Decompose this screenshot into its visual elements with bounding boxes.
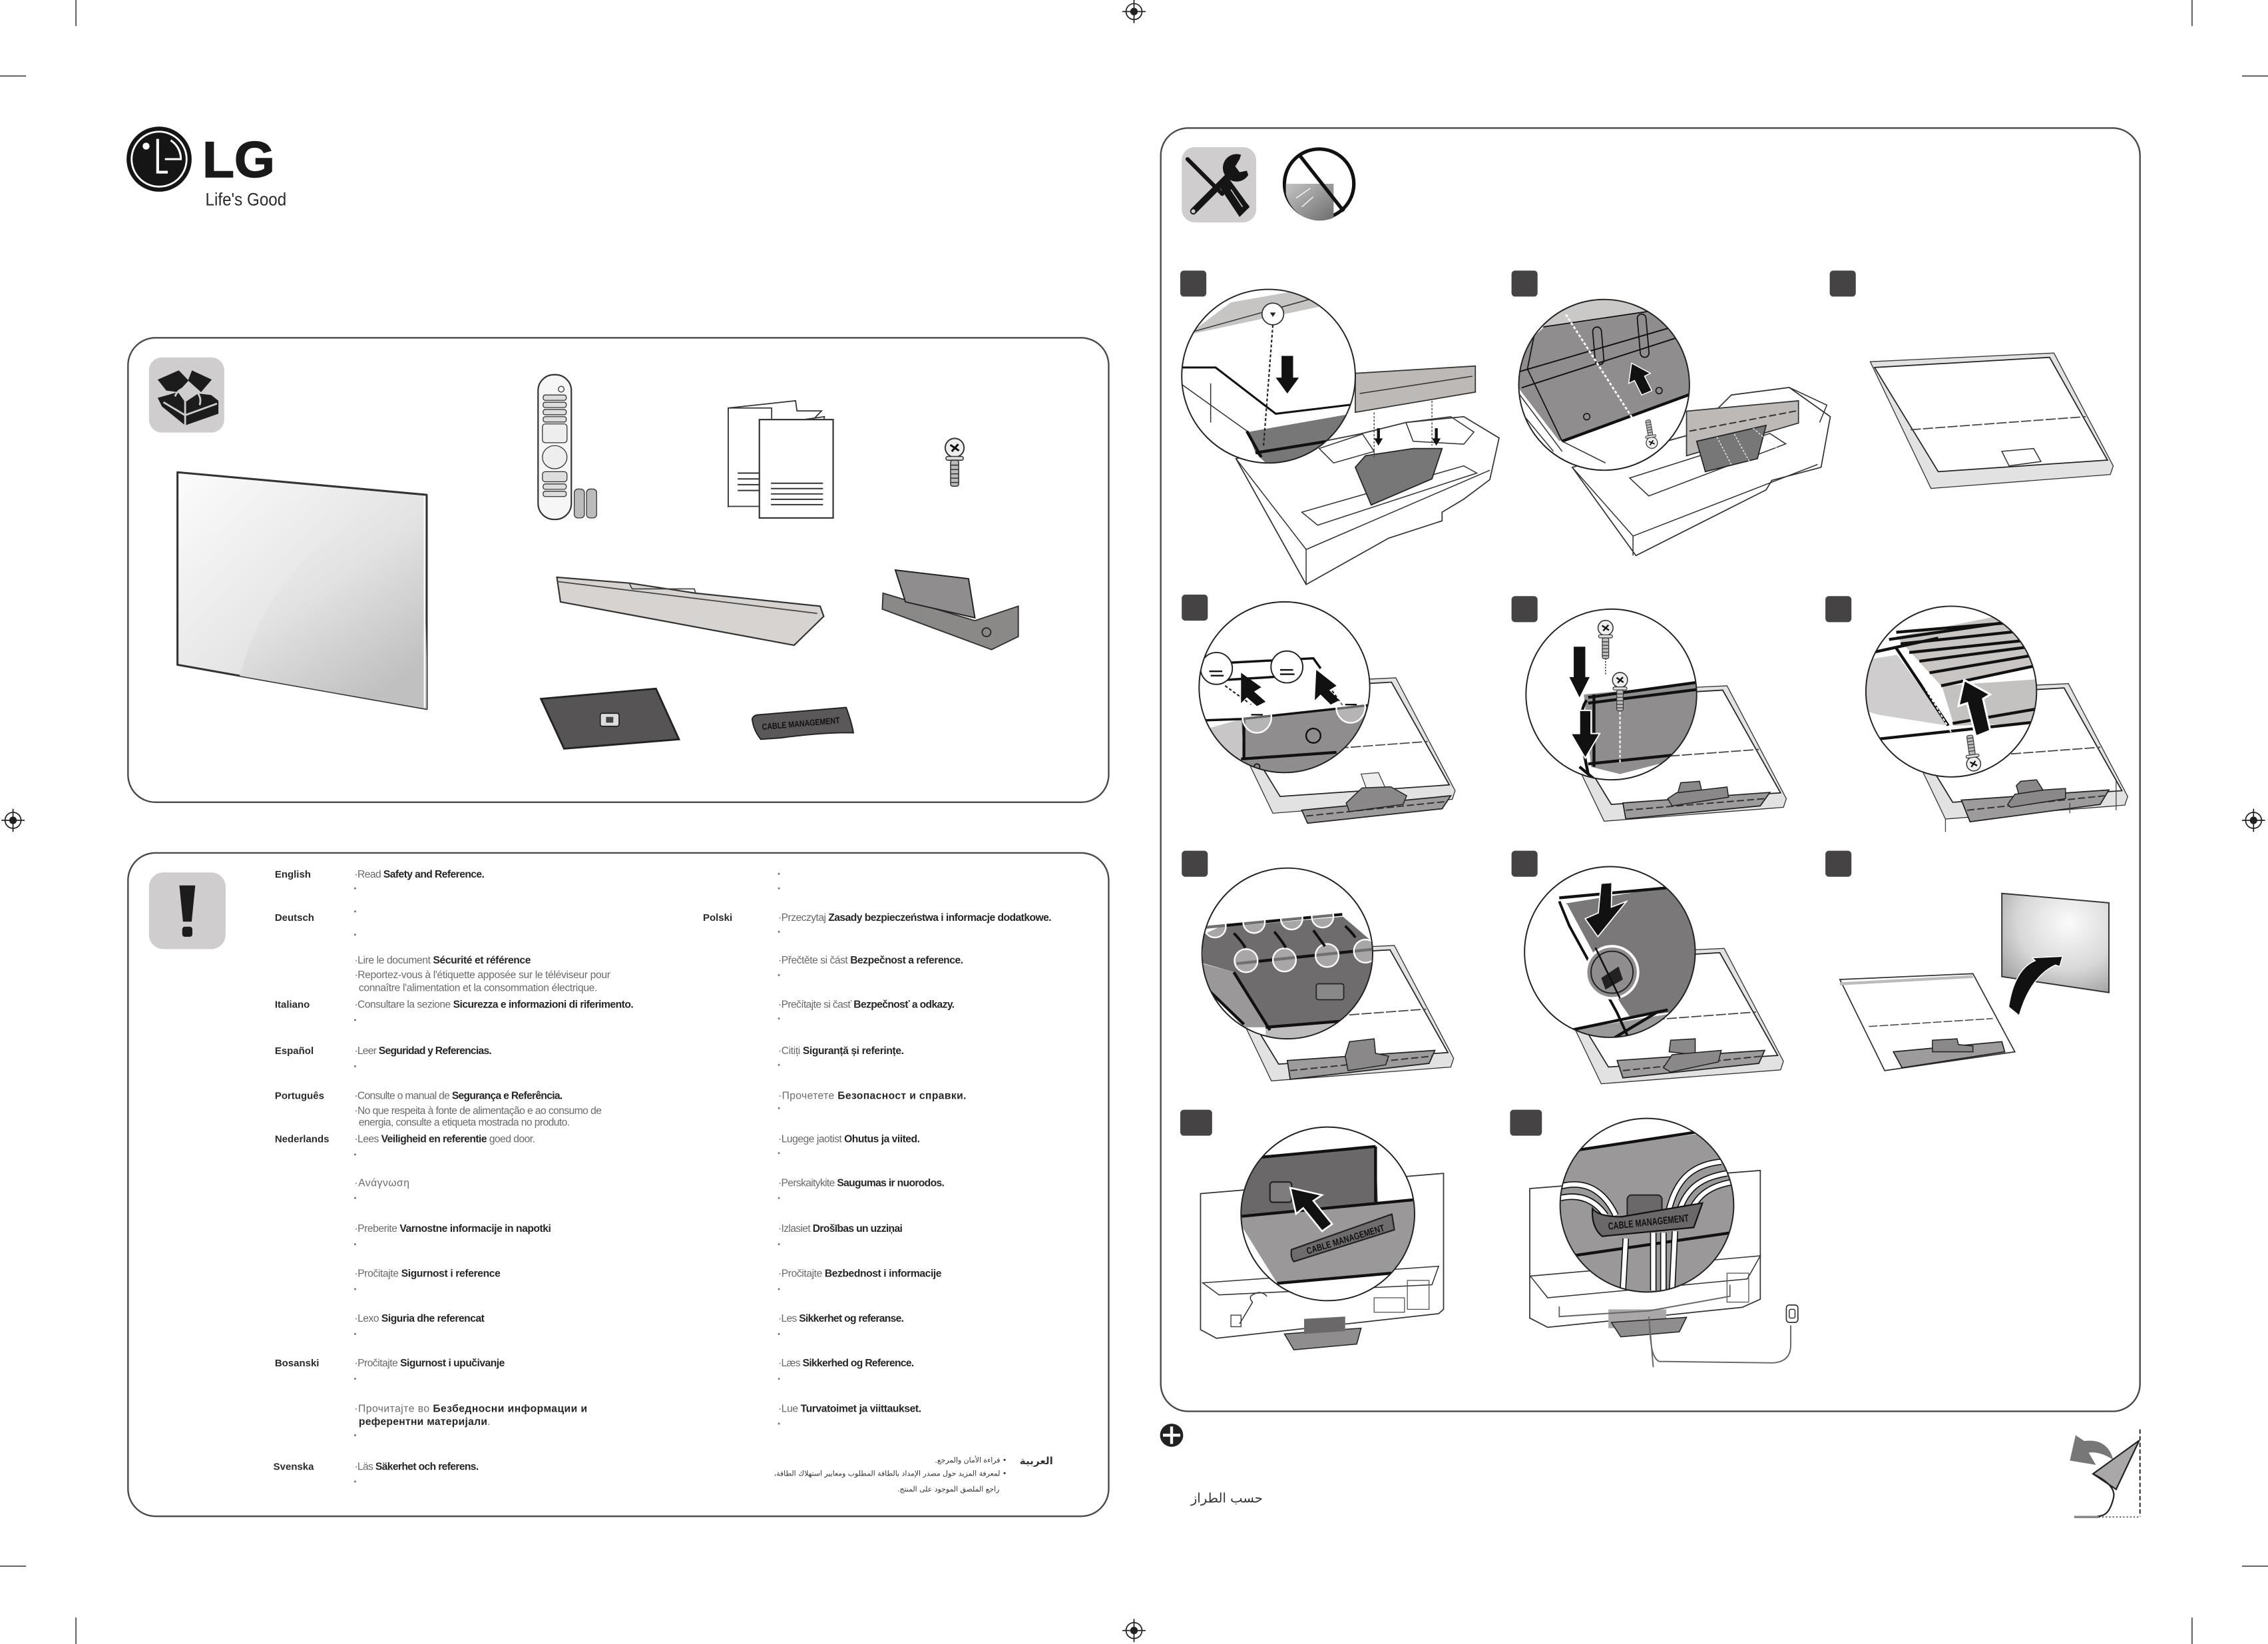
Arabic instructions <box>774 1455 1053 1494</box>
step 9 <box>1825 851 2109 1071</box>
instructions: right column: ·Læs Sikkerhed og Reference. <box>778 1358 914 1369</box>
step 11 magnified detail: CABLE MANAGEMENT <box>1608 1213 1690 1233</box>
step 1 magnified detail <box>1180 290 1359 470</box>
step 3 <box>1830 270 2114 489</box>
instructions: left column: ·Lees Veiligheid en referentie goed door. <box>354 1133 535 1145</box>
step 8 number badge <box>1512 851 1538 877</box>
instructions: right column: ·Lue Turvatoimet ja viittaukset. <box>778 1404 921 1415</box>
step 6 TV with stand <box>1885 684 2128 832</box>
step 10 magnified detail: CABLE MANAGEMENT <box>1305 1223 1386 1256</box>
instructions: left column: ·Lire le document Sécurité et référence <box>354 955 531 966</box>
instructions: left column: ·Consultare la sezione Sicurezza e informazioni di riferimento. <box>354 999 634 1010</box>
panel: language notes <box>128 853 1108 1516</box>
step 9 curved arrow <box>2008 956 2062 1015</box>
step 4 TV with stand <box>1212 678 1455 823</box>
Arabic instructions: • قراءة الأمان والمرجع. <box>935 1456 1007 1465</box>
remote control and batteries <box>538 375 596 519</box>
language names: left column: Nederlands <box>275 1133 329 1145</box>
step 4 <box>1182 595 1455 823</box>
instructions: left column: референтни материјали. <box>359 1416 491 1428</box>
step 7 <box>1182 851 1454 1081</box>
step 1 packaging drawing <box>1236 366 1499 585</box>
note: subject to model: حسب الطراز <box>1190 1490 1263 1506</box>
instructions: left column: ·Läs Säkerhet och referens. <box>354 1462 479 1473</box>
instructions: left column: ·No que respeita à fonte de alimentação e ao consumo de <box>354 1105 602 1117</box>
step 10 <box>1180 1110 1443 1350</box>
instructions: left column: ·Read Safety and Reference. <box>354 869 485 880</box>
LG logo <box>126 127 286 210</box>
instructions: right column: ·Izlasiet Drošības un uzziņai <box>778 1223 903 1234</box>
language names: left column: Bosanski <box>275 1358 319 1369</box>
step 3 number badge <box>1830 270 1856 296</box>
language name: Polski: Polski <box>703 912 732 924</box>
step 11 TV back with cables <box>1530 1171 1798 1367</box>
step 6 <box>1825 596 2128 832</box>
step 5 <box>1512 596 1786 821</box>
cable management clip: CABLE MANAGEMENT <box>762 715 840 732</box>
language names: left column: English <box>275 869 311 880</box>
registration mark: top <box>1122 0 1146 23</box>
instructions: left column: ·Preberite Varnostne informacije in napotki <box>354 1223 551 1234</box>
step 5 magnified detail <box>1526 609 1704 788</box>
step 9 number badge <box>1825 851 1851 877</box>
Arabic instructions: راجع الملصق الموجود على المنتج. <box>897 1485 999 1494</box>
step 8 <box>1512 851 1783 1084</box>
printed manuals <box>728 401 833 518</box>
step 10 magnified detail <box>1237 1127 1417 1300</box>
step 11 magnified detail <box>1555 1119 1735 1295</box>
stand screw <box>945 438 964 486</box>
instructions: left column: ·Прочитајте во Безбедносни информации и <box>354 1404 587 1415</box>
language names: left column: Português <box>275 1090 324 1101</box>
instructions: right column: ·Les Sikkerhet og referanse. <box>778 1313 904 1324</box>
icon: no scratching prohibition <box>1284 149 1354 220</box>
step 11 <box>1510 1110 1798 1367</box>
instructions: right column: ·Przeczytaj Zasady bezpieczeństwa i informacje dodatkowe. <box>778 912 1052 924</box>
instructions: left column: connaître l'alimentation et la consommation électrique. <box>359 982 597 993</box>
step 2 <box>1512 270 1831 555</box>
step 10 number badge <box>1180 1110 1212 1136</box>
panel: assembly steps <box>1161 128 2140 1412</box>
instructions: left column <box>354 869 634 1473</box>
icon: exclamation mark <box>149 872 226 949</box>
instructions: left column: ·Pročitajte Sigurnost i upučivanje <box>354 1358 505 1369</box>
instructions: left column: ·Pročitajte Sigurnost i reference <box>354 1268 501 1280</box>
step 8 TV with stand <box>1540 948 1783 1084</box>
instructions: right column: ·Citiți Siguranță și referințe. <box>778 1045 904 1057</box>
icon: plus note marker <box>1160 1424 1183 1447</box>
instructions: left column: ·Lexo Siguria dhe referencat <box>354 1313 485 1324</box>
empty bullets: right column <box>778 873 780 1425</box>
Arabic instructions: العربية <box>1020 1455 1053 1467</box>
icon: turn page corner <box>2070 1430 2141 1517</box>
language names: left column: Deutsch <box>275 912 314 924</box>
step 10 TV back <box>1200 1173 1443 1350</box>
step 7 TV with stand <box>1211 946 1454 1081</box>
step 6 number badge <box>1825 596 1851 622</box>
language names: left column: Svenska <box>274 1462 314 1473</box>
instructions: left column: ·Consulte o manual de Segurança e Referência. <box>354 1090 563 1101</box>
instructions: left column: ·Ανάγνωση <box>354 1178 409 1189</box>
registration mark: bottom <box>1122 1619 1146 1642</box>
cable management clip <box>752 708 853 739</box>
instructions: right column: ·Прочетете Безопасност и справки. <box>778 1090 966 1101</box>
icon: tools <box>1182 147 1256 222</box>
instructions: left column: ·Leer Seguridad y Referencias. <box>354 1045 492 1057</box>
step 11 number badge <box>1510 1110 1542 1136</box>
instructions: right column: ·Přečtěte si část Bezpečnost a reference. <box>778 955 963 966</box>
step 3 TV face down on cushion <box>1870 353 2114 489</box>
logo wordmark: LG <box>202 132 275 188</box>
step 1 number badge <box>1180 270 1206 296</box>
empty bullets: left column <box>354 888 356 1483</box>
step 7 magnified detail <box>1202 868 1377 1056</box>
logo emblem <box>126 127 192 192</box>
icon: open box <box>149 358 224 433</box>
step 9 TV standing <box>2002 894 2109 993</box>
stand base bar <box>557 577 823 645</box>
step 5 TV with stand <box>1543 686 1786 821</box>
language names: left column: Italiano <box>275 999 310 1010</box>
Arabic instructions: • لمعرفة المزيد حول مصدر الإمداد بالطاقة المطلوب ومعايير استهلاك الطاقة، <box>774 1469 1007 1478</box>
step 7 number badge <box>1182 851 1208 877</box>
instructions: right column: ·Pročitajte Bezbednost i informacije <box>778 1268 942 1280</box>
logo tagline: Life's Good <box>206 189 286 210</box>
step 9 TV lying flat <box>1840 973 2015 1071</box>
language names: left column <box>274 869 329 1473</box>
step 2 packaging drawing <box>1572 388 1831 555</box>
language names: left column: Español <box>275 1045 314 1057</box>
instructions: left column: ·Reportez-vous à l'étiquette apposée sur le téléviseur pour <box>354 969 610 981</box>
registration mark: right <box>2242 809 2265 832</box>
step 4 number badge <box>1182 595 1208 621</box>
TV set <box>178 472 428 712</box>
step 6 magnified detail <box>1859 606 2040 777</box>
registration mark: left <box>1 809 25 832</box>
step 1 <box>1180 270 1499 585</box>
stand bracket <box>882 570 1019 650</box>
instructions: left column: energia, consulte a etiqueta mostrada no produto. <box>359 1117 570 1128</box>
panel: box contents <box>128 338 1108 802</box>
step 8 magnified detail <box>1524 867 1704 1041</box>
step 2 magnified detail <box>1512 296 1700 470</box>
instructions: right column: ·Lugege jaotist Ohutus ja viited. <box>778 1133 920 1145</box>
step 2 number badge <box>1512 270 1538 296</box>
step 5 number badge <box>1512 596 1538 622</box>
step 4 magnified detail <box>1199 602 1374 781</box>
instructions: right column: ·Perskaitykite Saugumas ir nuorodos. <box>778 1178 945 1189</box>
instructions: right column <box>778 912 1052 1415</box>
back cover <box>541 688 679 748</box>
instructions: right column: ·Prečítajte si časť Bezpečnosť a odkazy. <box>778 999 955 1010</box>
